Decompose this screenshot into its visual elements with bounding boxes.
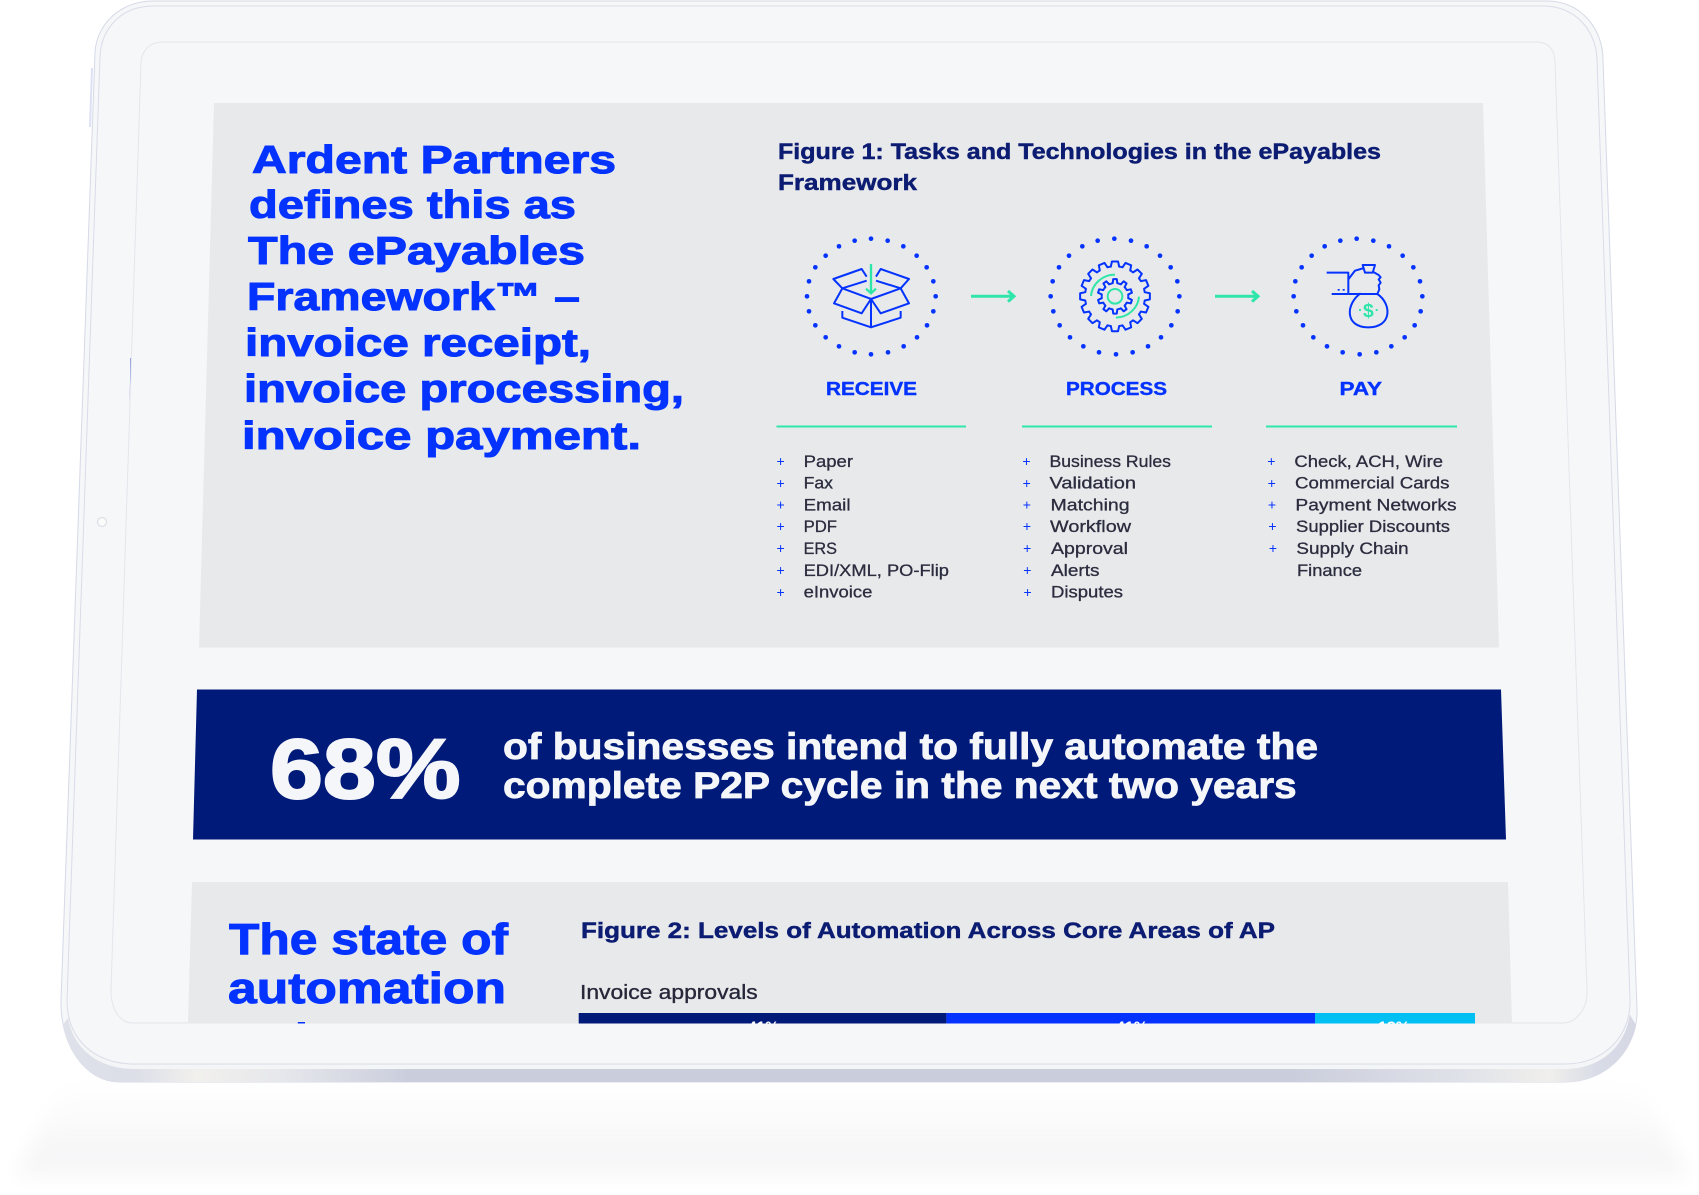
- list: process items: Workflow: [1050, 517, 1132, 536]
- label: receive: RECEIVE: [826, 378, 917, 399]
- bar label: invoice approvals: Invoice approvals: [580, 982, 758, 1004]
- figure 1 title: Framework: [778, 170, 918, 195]
- list: receive items: Email: [804, 496, 850, 514]
- stat: 68%: 68%: [270, 722, 460, 816]
- volume accent: [130, 358, 131, 418]
- list: pay items: Check, ACH, Wire: [1294, 452, 1443, 471]
- heading: Ardent Partners definition: [242, 139, 684, 458]
- screen outline: [111, 42, 1587, 1023]
- column: receive: [776, 378, 966, 602]
- label: pay: PAY: [1340, 378, 1383, 399]
- camera dot: [98, 518, 106, 526]
- heading: Ardent Partners definition: invoice processing,: [244, 368, 684, 411]
- callout banner: 68% statistic: [193, 690, 1506, 840]
- stacked bar: invoice approvals: 18%: [1378, 1020, 1410, 1036]
- figure 2 title: Figure 2: Levels of Automation Across Core Areas of AP: [581, 918, 1275, 943]
- list: receive items: EDI/XML, PO-Flip: [804, 561, 949, 580]
- list: process items: +: [1023, 496, 1031, 512]
- list: receive items: +: [777, 540, 785, 556]
- list: pay items: +: [1267, 453, 1275, 469]
- list: process items: Disputes: [1051, 582, 1123, 602]
- list: process items: +: [1023, 540, 1031, 556]
- list: pay items: +: [1268, 496, 1276, 512]
- heading: state of automation: Today: [228, 1015, 359, 1064]
- list: pay items: Payment Networks: [1295, 496, 1457, 514]
- list: receive items: +: [777, 453, 785, 469]
- list: receive items: +: [777, 496, 785, 512]
- heading: Ardent Partners definition: invoice receipt,: [245, 322, 591, 365]
- list: receive items: [777, 452, 949, 602]
- heading: Ardent Partners definition: The ePayables: [248, 230, 585, 273]
- panel background: [188, 882, 1512, 1024]
- heading: Ardent Partners definition: invoice payment.: [242, 415, 641, 458]
- icon: pay money bag: [1291, 236, 1425, 357]
- heading: state of automation: [228, 922, 509, 1024]
- column: pay: [1266, 378, 1457, 580]
- heading: state of automation: The state of: [229, 915, 508, 964]
- list: receive items: Paper: [804, 452, 853, 471]
- column: process: [1022, 378, 1212, 602]
- list: pay items: +: [1269, 540, 1277, 556]
- list: pay items: +: [1268, 518, 1277, 534]
- list: process items: +: [1023, 475, 1031, 491]
- list: pay items: Supplier Discounts: [1296, 517, 1450, 536]
- panel background: [199, 103, 1499, 648]
- banner text: [503, 726, 1318, 806]
- panel: state of automation: [188, 882, 1512, 1024]
- heading: Ardent Partners definition: Ardent Partners: [252, 139, 616, 182]
- device bottom edge: [63, 1015, 1636, 1082]
- list: process items: Matching: [1050, 496, 1130, 514]
- arrow: process to pay: [1215, 291, 1258, 302]
- list: pay items: Commercial Cards: [1295, 474, 1450, 492]
- rule: process: [1022, 426, 1212, 428]
- banner text: complete P2P cycle in the next two years: [503, 765, 1297, 806]
- list: receive items: ERS: [804, 539, 837, 558]
- heading: state of automation: automation: [228, 964, 506, 1013]
- list: receive items: +: [777, 584, 785, 600]
- list: pay items: Finance: [1297, 561, 1362, 580]
- list: receive items: +: [777, 518, 785, 534]
- stacked bar: invoice approvals: 41%: [748, 1020, 779, 1036]
- stacked bar: invoice approvals: [578, 1013, 1475, 1024]
- heading: Ardent Partners definition: Framework™ –: [247, 276, 580, 319]
- stacked bar: invoice approvals: 41%: [1116, 1020, 1148, 1036]
- list: receive items: eInvoice: [804, 582, 872, 602]
- banner text: of businesses intend to fully automate the: [503, 726, 1318, 767]
- list: receive items: +: [777, 475, 785, 491]
- icon: receive box: [805, 236, 938, 357]
- panel: ePayables framework: [199, 103, 1499, 648]
- heading: Ardent Partners definition: defines this as: [249, 184, 576, 227]
- banner background: [193, 690, 1506, 840]
- list: process items: +: [1022, 453, 1031, 469]
- list: process items: Validation: [1050, 474, 1136, 492]
- list: receive items: Fax: [804, 474, 834, 492]
- list: pay items: Supply Chain: [1296, 539, 1409, 558]
- rule: pay: [1266, 426, 1457, 428]
- list: process items: [1022, 452, 1171, 602]
- list: process items: Approval: [1051, 539, 1128, 558]
- side button: [90, 68, 92, 127]
- list: process items: Alerts: [1051, 561, 1100, 580]
- icon: process gears: [1048, 236, 1182, 357]
- list: process items: +: [1023, 518, 1031, 534]
- list: pay items: [1267, 452, 1457, 580]
- arrow: receive to process: [971, 291, 1014, 302]
- label: process: PROCESS: [1066, 378, 1167, 399]
- list: process items: +: [1023, 562, 1031, 578]
- figure 1 title: Figure 1: Tasks and Technologies in the ePayables: [778, 139, 1381, 164]
- icon: pay money bag: $: [1363, 301, 1374, 322]
- list: receive items: +: [777, 562, 785, 578]
- list: pay items: +: [1268, 475, 1276, 491]
- list: process items: Business Rules: [1050, 452, 1171, 471]
- tablet shadow: [14, 1085, 1690, 1178]
- list: process items: +: [1024, 584, 1032, 600]
- list: receive items: PDF: [804, 517, 837, 536]
- rule: receive: [776, 426, 966, 428]
- figure 1 title: [778, 139, 1381, 195]
